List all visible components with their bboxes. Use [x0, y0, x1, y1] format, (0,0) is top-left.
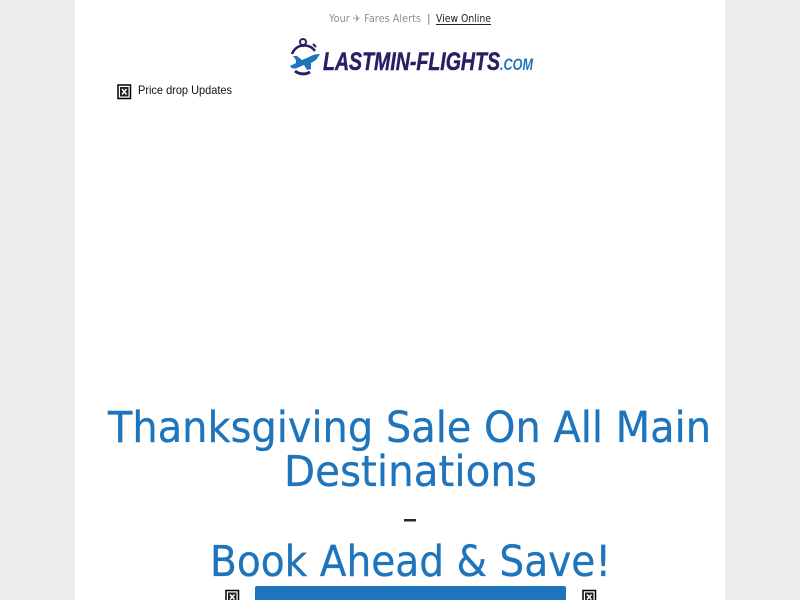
broken image placeholder: right	[583, 590, 596, 600]
main heading: Destinations	[284, 447, 537, 497]
preheader text: View Online	[436, 13, 491, 25]
icon: stopwatch with plane	[290, 39, 320, 74]
broken image placeholder: price drop: Price drop Updates	[138, 83, 232, 97]
sub heading: Book Ahead & Save!	[210, 537, 611, 587]
logo wordmark: LASTMIN-FLIGHTS	[323, 48, 500, 76]
main heading	[107, 403, 711, 497]
logo	[290, 39, 534, 76]
dash separator	[404, 519, 416, 522]
call to action button	[255, 586, 566, 600]
broken image placeholder: price drop	[118, 83, 232, 98]
preheader text	[328, 13, 491, 25]
preheader text: |	[427, 13, 431, 25]
logo domain suffix: .COM	[500, 55, 534, 74]
main heading: Thanksgiving Sale On All Main	[107, 403, 711, 453]
preheader text: Your ✈ Fares Alerts	[328, 13, 421, 25]
broken image placeholder: left	[226, 590, 238, 600]
